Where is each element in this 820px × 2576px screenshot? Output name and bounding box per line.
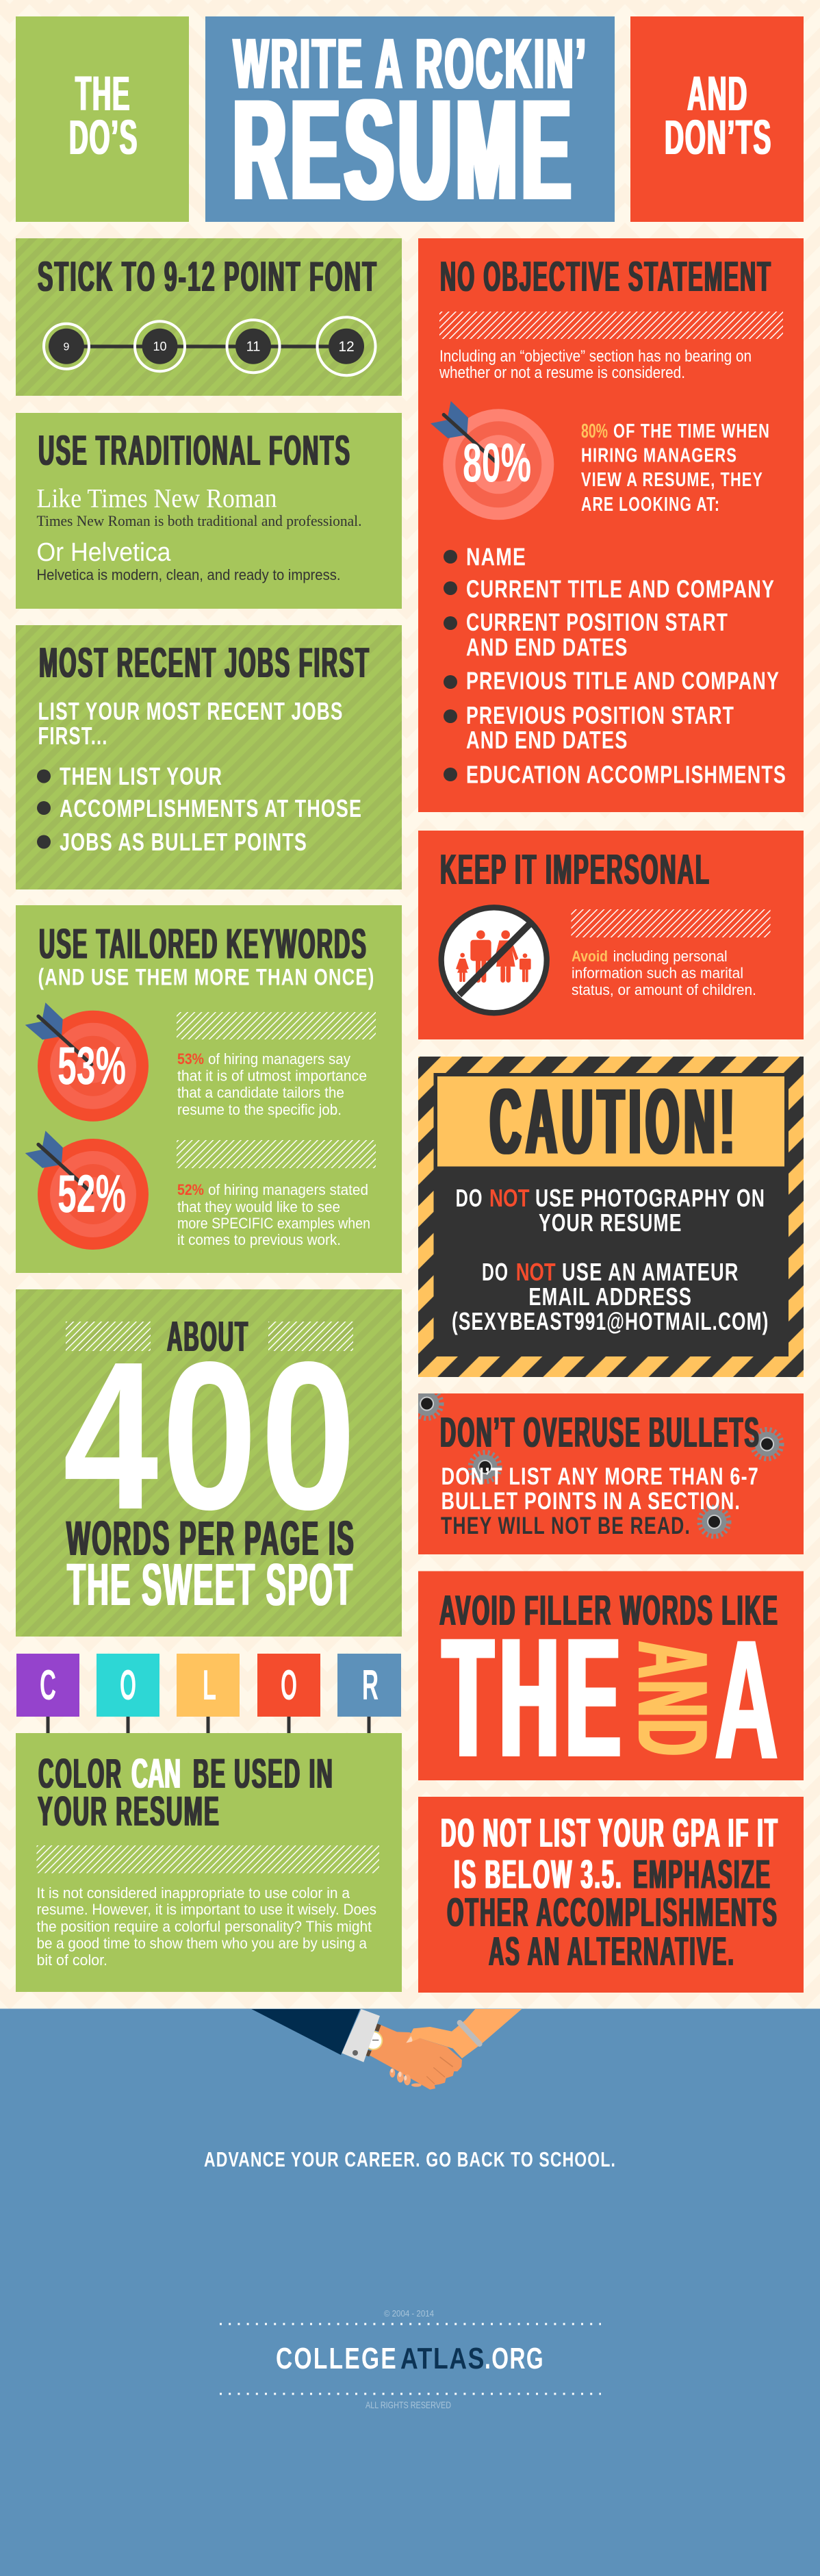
body text	[441, 1463, 759, 1539]
caption	[66, 1512, 355, 1618]
call to action: ADVANCE YOUR CAREER. GO BACK TO SCHOOL.	[204, 2147, 616, 2171]
panel: caution	[418, 1057, 804, 1377]
bullet list: JOBS AS BULLET POINTS	[60, 828, 307, 856]
sign O	[97, 1654, 159, 1734]
caution: email: USE AN AMATEUR	[562, 1258, 739, 1286]
text: 52 percent: more SPECIFIC examples when	[177, 1215, 370, 1232]
heading: COLOR	[38, 1750, 123, 1797]
intro text	[439, 347, 752, 382]
intro text: Including an “objective” section has no bearing on	[439, 347, 752, 366]
font size scale: 9	[64, 341, 70, 353]
hatch right	[268, 1322, 353, 1351]
caution: email: NOT	[516, 1258, 556, 1286]
caution: email: DO	[482, 1258, 509, 1286]
font size scale	[44, 317, 375, 375]
panel: tailored keywords	[16, 905, 402, 1273]
body text: resume. However, it is important to use it wisely. Does	[37, 1901, 376, 1918]
intro text: whether or not a resume is considered.	[439, 364, 685, 382]
caption: THE SWEET SPOT	[67, 1552, 354, 1618]
heading: YOUR RESUME	[38, 1788, 220, 1834]
bullet list: CURRENT POSITION START	[466, 608, 728, 636]
word: and rotated: AND	[617, 1641, 728, 1758]
logo: ATLAS	[400, 2342, 485, 2375]
times example: Times New Roman is both traditional and professional.	[37, 512, 361, 529]
panel: traditional fonts	[16, 413, 402, 609]
gpa text: IS BELOW 3.5.	[454, 1852, 623, 1897]
hatch divider	[177, 1140, 376, 1168]
title text	[233, 24, 588, 230]
heading	[38, 1750, 334, 1834]
logo	[276, 2342, 544, 2375]
text: 53 percent: that a candidate tailors the	[177, 1084, 344, 1101]
text: 53 percent: that it is of utmost importance	[177, 1067, 367, 1085]
hatch divider	[177, 1012, 376, 1039]
heading: the do's	[69, 67, 138, 165]
bullet list: PREVIOUS POSITION START	[466, 701, 734, 729]
text: 53 percent: 53%	[177, 1050, 204, 1068]
footer	[0, 2009, 820, 2576]
bullet list: AND END DATES	[466, 633, 628, 661]
icon: bullet holes	[412, 1389, 782, 1537]
sign O: O	[120, 1662, 136, 1709]
panel: font size	[16, 238, 402, 396]
caption: WORDS PER PAGE IS	[66, 1512, 355, 1566]
caution: photography: YOUR RESUME	[539, 1209, 682, 1237]
body text: information such as marital	[572, 964, 743, 981]
big number 400: 400	[63, 1318, 359, 1554]
hatch divider	[571, 909, 771, 937]
sign R: R	[362, 1662, 379, 1709]
heading: and don'ts: AND	[687, 67, 748, 121]
target 52 percent	[25, 1131, 149, 1250]
dotted rule	[220, 2323, 601, 2325]
header panel: the do's	[16, 16, 189, 222]
panel: overuse bullets	[412, 1389, 804, 1554]
sign L	[177, 1654, 240, 1734]
panel: gpa	[418, 1797, 804, 1993]
panel: keep it impersonal	[418, 831, 804, 1039]
bullet list: ACCOMPLISHMENTS AT THOSE	[60, 794, 362, 822]
heading: STICK TO 9-12 POINT FONT	[38, 253, 378, 301]
body text: THEY WILL NOT BE READ.	[441, 1513, 691, 1539]
body text: It is not considered inappropriate to use color in a	[37, 1884, 350, 1902]
text: 52 percent: of hiring managers stated	[208, 1181, 368, 1198]
intro text: LIST YOUR MOST RECENT JOBS	[38, 697, 344, 725]
text: 52 percent	[177, 1181, 370, 1248]
sign C	[16, 1654, 79, 1734]
sign O: O	[281, 1662, 297, 1709]
body text	[572, 948, 756, 998]
target 53 percent: 53%	[57, 1035, 126, 1096]
caution: email	[452, 1258, 769, 1335]
body text	[37, 1884, 376, 1969]
font size scale: 10	[153, 340, 167, 353]
80 percent text: 80%	[581, 420, 608, 442]
panel: color	[16, 1733, 402, 1992]
target 80 percent: 80%	[463, 432, 531, 493]
panel: word count: ABOUT	[167, 1313, 249, 1361]
panel: recent jobs	[16, 625, 402, 889]
gpa text	[441, 1810, 779, 1974]
heading: USE TAILORED KEYWORDS	[39, 920, 368, 968]
heading: MOST RECENT JOBS FIRST	[39, 640, 370, 687]
caution: email: EMAIL ADDRESS	[528, 1283, 692, 1311]
text: 53 percent: resume to the specific job.	[177, 1101, 342, 1118]
heading: USE TRADITIONAL FONTS	[38, 427, 351, 475]
panel: no objective statement	[418, 238, 804, 812]
target 80 percent	[431, 401, 554, 520]
caution: photography: DO	[456, 1184, 483, 1212]
helvetica example: Helvetica is modern, clean, and ready to impress.	[37, 566, 341, 583]
body text: Avoid	[572, 948, 608, 965]
bullet list	[37, 762, 362, 856]
color signs	[16, 1654, 401, 1734]
font size scale: 11	[246, 340, 260, 355]
bullet list	[444, 542, 786, 789]
title panel	[205, 16, 615, 230]
sign O	[257, 1654, 320, 1734]
rights reserved: ALL RIGHTS RESERVED	[366, 2399, 451, 2410]
caution: photography: NOT	[489, 1184, 530, 1212]
times example	[37, 483, 361, 529]
body text: including personal	[613, 948, 728, 965]
helvetica example: Or Helvetica	[37, 538, 171, 567]
text: 52 percent: that they would like to see	[177, 1198, 340, 1215]
80 percent text: ARE LOOKING AT:	[581, 494, 720, 516]
hatch divider	[439, 312, 783, 339]
80 percent text: VIEW A RESUME, THEY	[581, 469, 763, 491]
body text: status, or amount of children.	[572, 981, 756, 998]
copyright: © 2004 - 2014	[384, 2308, 434, 2319]
panel: filler words: THE	[443, 1602, 627, 1793]
body text: be a good time to show them who you are by using a	[37, 1935, 368, 1952]
heading: and don'ts	[665, 67, 772, 165]
target 53 percent	[25, 1002, 149, 1122]
intro text: FIRST...	[38, 722, 108, 750]
logo: .ORG	[485, 2342, 544, 2375]
dotted rule	[220, 2392, 601, 2395]
caution: photography	[456, 1184, 765, 1237]
header panel: and don'ts	[630, 16, 804, 222]
panel: word count	[16, 1289, 402, 1637]
sign R	[337, 1654, 401, 1734]
helvetica example	[37, 538, 341, 583]
body text: the position require a colorful personality? This might	[37, 1918, 372, 1935]
sign C: C	[40, 1662, 56, 1709]
background pattern	[0, 0, 820, 2009]
font size scale: 12	[338, 339, 355, 355]
intro text	[38, 697, 344, 750]
80 percent text: OF THE TIME WHEN	[613, 420, 770, 442]
text: 52 percent: it comes to previous work.	[177, 1231, 341, 1248]
target 52 percent: 52%	[57, 1163, 126, 1224]
logo: COLLEGE	[276, 2342, 398, 2375]
80 percent text: HIRING MANAGERS	[581, 445, 737, 467]
sign L: L	[203, 1662, 216, 1709]
text: 52 percent: 52%	[177, 1181, 204, 1198]
heading: CAN	[131, 1750, 181, 1797]
heading: (AND USE THEM MORE THAN ONCE)	[38, 964, 375, 990]
bullet list: THEN LIST YOUR	[60, 762, 222, 790]
heading: the do's: THE	[75, 67, 131, 121]
80 percent text	[581, 420, 770, 516]
icon: handshake	[251, 2009, 522, 2090]
bullet list: AND END DATES	[466, 726, 628, 754]
heading	[38, 920, 375, 990]
bullet list: NAME	[466, 542, 526, 571]
text: 53 percent	[177, 1050, 367, 1118]
body text: bit of color.	[37, 1952, 107, 1969]
times example: Like Times New Roman	[37, 483, 277, 514]
icon: no family	[441, 907, 547, 1013]
hatch divider	[37, 1845, 379, 1873]
text: 53 percent: of hiring managers say	[208, 1050, 350, 1068]
heading: BE USED IN	[193, 1750, 334, 1797]
heading: the do's: DO’S	[69, 111, 138, 165]
hatch left	[66, 1322, 151, 1351]
